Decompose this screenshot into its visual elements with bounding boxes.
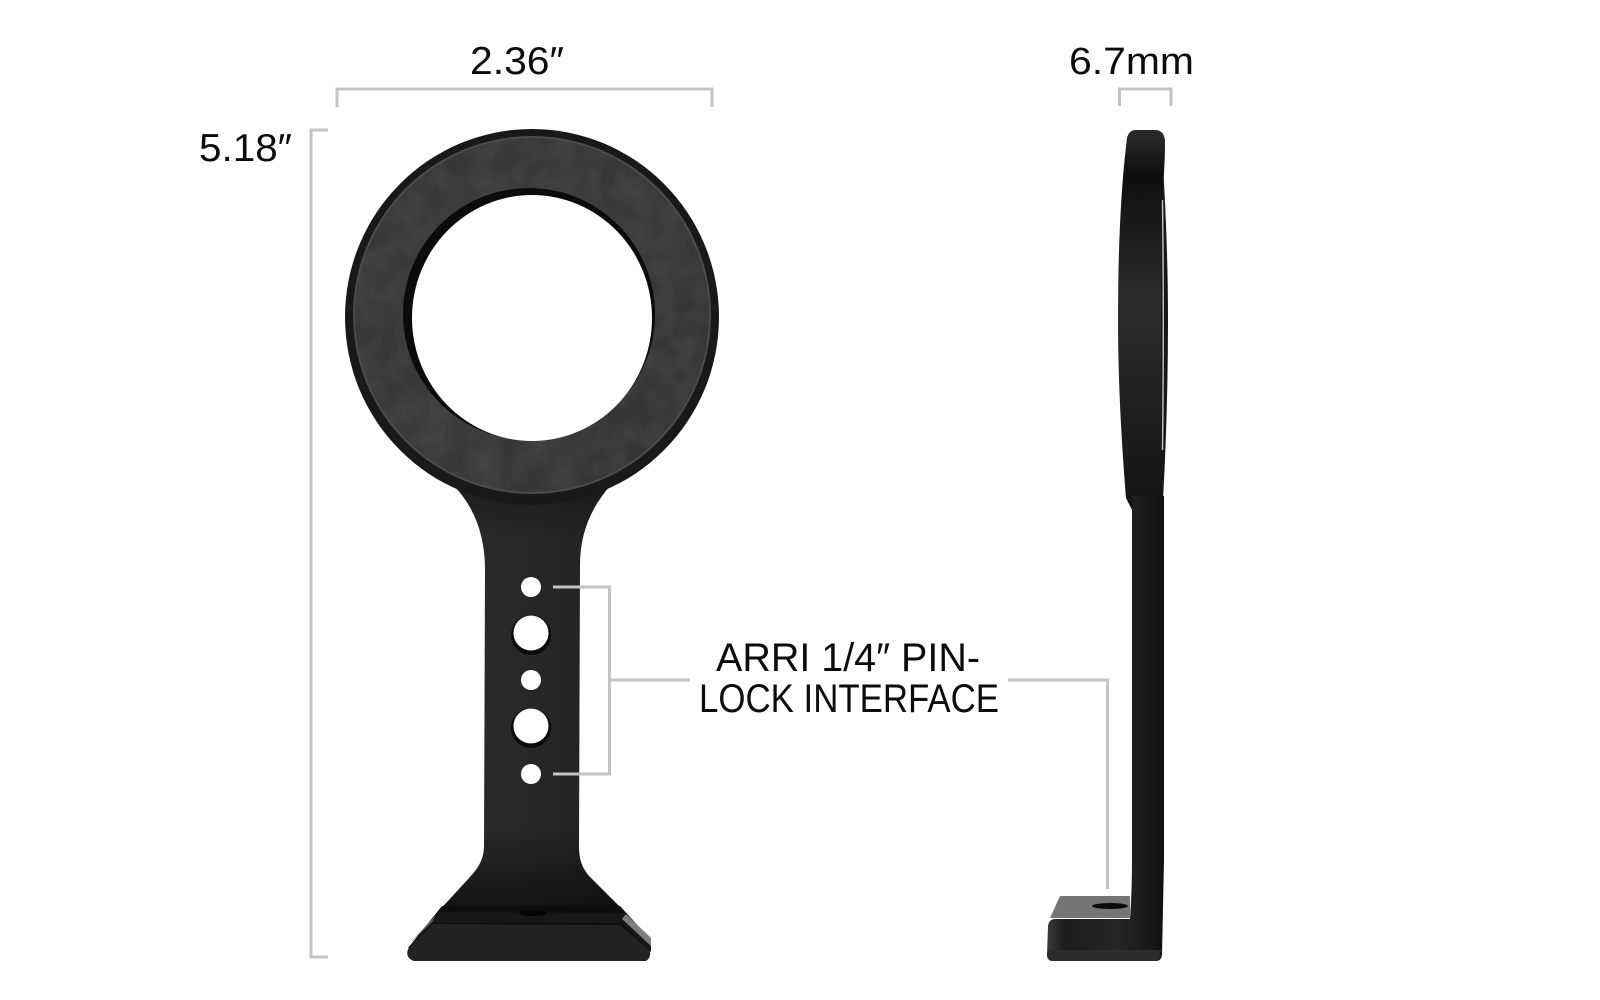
pin-lock interface label: ARRI 1/4″ PIN- — [716, 636, 980, 680]
side view rear lip — [1160, 150, 1168, 500]
pin-lock interface label: LOCK INTERFACE — [699, 677, 999, 721]
height dimension bracket — [311, 130, 328, 957]
thickness label: 6.7mm — [1069, 41, 1194, 83]
front view bracket — [345, 129, 719, 961]
thickness dimension bracket — [1120, 89, 1171, 106]
leader line to side view — [1008, 680, 1108, 889]
width label: 2.36″ — [470, 40, 564, 83]
pin holes — [511, 577, 551, 784]
side view foot top face — [1050, 896, 1130, 918]
side view ring edge — [1118, 130, 1165, 510]
side view bracket — [1047, 130, 1168, 961]
side view stem and foot — [1047, 496, 1164, 961]
stem and foot body — [437, 486, 626, 913]
height label: 5.18″ — [199, 127, 292, 170]
side view gap highlight — [1162, 200, 1164, 450]
width dimension bracket — [337, 89, 712, 107]
foot base plate — [407, 906, 651, 961]
dimension diagram — [200, 46, 1192, 961]
mounting ring — [345, 129, 719, 505]
pin-lock interface label — [699, 636, 999, 721]
foot screw hole — [519, 910, 547, 916]
side view foot hole — [1092, 903, 1128, 909]
pin interface bracket and leader — [553, 587, 690, 774]
ring opening — [412, 195, 652, 441]
